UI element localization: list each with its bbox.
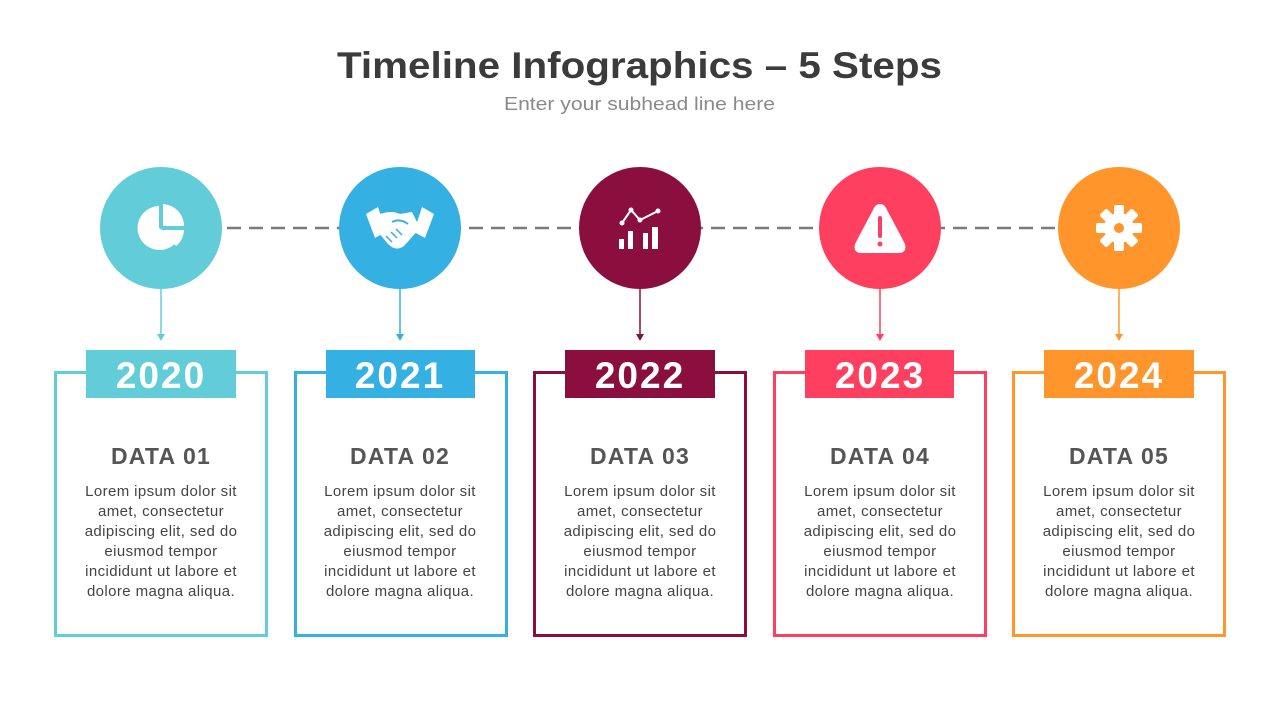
subhead: Enter your subhead line here xyxy=(504,94,775,114)
body text: eiusmod tempor xyxy=(583,543,697,560)
year tab xyxy=(326,350,475,398)
step 5 xyxy=(1014,167,1224,636)
body text: Lorem ipsum dolor sit xyxy=(324,483,476,500)
body text: dolore magna aliqua. xyxy=(806,583,954,600)
box xyxy=(56,372,266,636)
body text: amet, consectetur xyxy=(577,503,703,520)
body text: dolore magna aliqua. xyxy=(566,583,714,600)
body text: amet, consectetur xyxy=(98,503,224,520)
box xyxy=(534,372,746,636)
year tab: 2020 xyxy=(116,355,206,396)
heading: DATA 01 xyxy=(111,443,211,469)
body text: incididunt ut labore et xyxy=(85,563,237,580)
body text: incididunt ut labore et xyxy=(804,563,956,580)
body text: adipiscing elit, sed do xyxy=(85,523,237,540)
heading: DATA 03 xyxy=(590,443,690,469)
body text: eiusmod tempor xyxy=(823,543,937,560)
body text: incididunt ut labore et xyxy=(1043,563,1195,580)
body text: adipiscing elit, sed do xyxy=(804,523,956,540)
icon: handshake circle xyxy=(339,167,461,289)
heading: DATA 04 xyxy=(830,443,930,469)
year tab xyxy=(805,350,954,398)
step 1 xyxy=(56,167,266,636)
dashed timeline xyxy=(161,227,1119,229)
year tab: 2022 xyxy=(595,355,685,396)
arrow xyxy=(636,289,644,341)
body text: dolore magna aliqua. xyxy=(326,583,474,600)
box xyxy=(774,372,986,636)
body text: eiusmod tempor xyxy=(104,543,218,560)
year tab xyxy=(565,350,715,398)
body text: Lorem ipsum dolor sit xyxy=(85,483,237,500)
body text: adipiscing elit, sed do xyxy=(324,523,476,540)
box xyxy=(1014,372,1224,636)
icon: chart circle xyxy=(579,167,701,289)
body text: amet, consectetur xyxy=(337,503,463,520)
body text: incididunt ut labore et xyxy=(564,563,716,580)
year tab: 2023 xyxy=(835,355,925,396)
body text: dolore magna aliqua. xyxy=(87,583,235,600)
step 3 xyxy=(534,167,746,636)
step 2 xyxy=(296,167,506,636)
body text: Lorem ipsum dolor sit xyxy=(804,483,956,500)
icon: pie chart circle xyxy=(100,167,222,289)
box xyxy=(296,372,506,636)
body text: incididunt ut labore et xyxy=(324,563,476,580)
body text: amet, consectetur xyxy=(1056,503,1182,520)
body text: eiusmod tempor xyxy=(343,543,457,560)
heading: DATA 05 xyxy=(1069,443,1169,469)
body text: adipiscing elit, sed do xyxy=(1043,523,1195,540)
heading: DATA 02 xyxy=(350,443,450,469)
icon: warning circle xyxy=(819,167,941,289)
arrow xyxy=(1115,289,1123,341)
body text: Lorem ipsum dolor sit xyxy=(564,483,716,500)
year tab xyxy=(1044,350,1194,398)
year tab: 2024 xyxy=(1074,355,1164,396)
body text: adipiscing elit, sed do xyxy=(564,523,716,540)
arrow xyxy=(876,289,884,341)
body text: Lorem ipsum dolor sit xyxy=(1043,483,1195,500)
arrow xyxy=(396,289,404,341)
step 4 xyxy=(774,167,986,636)
icon: gear circle xyxy=(1058,167,1180,289)
year tab xyxy=(86,350,236,398)
body text: dolore magna aliqua. xyxy=(1045,583,1193,600)
arrow xyxy=(157,289,165,341)
body text: amet, consectetur xyxy=(817,503,943,520)
title: Timeline Infographics – 5 Steps xyxy=(337,45,942,86)
year tab: 2021 xyxy=(355,355,445,396)
body text: eiusmod tempor xyxy=(1062,543,1176,560)
